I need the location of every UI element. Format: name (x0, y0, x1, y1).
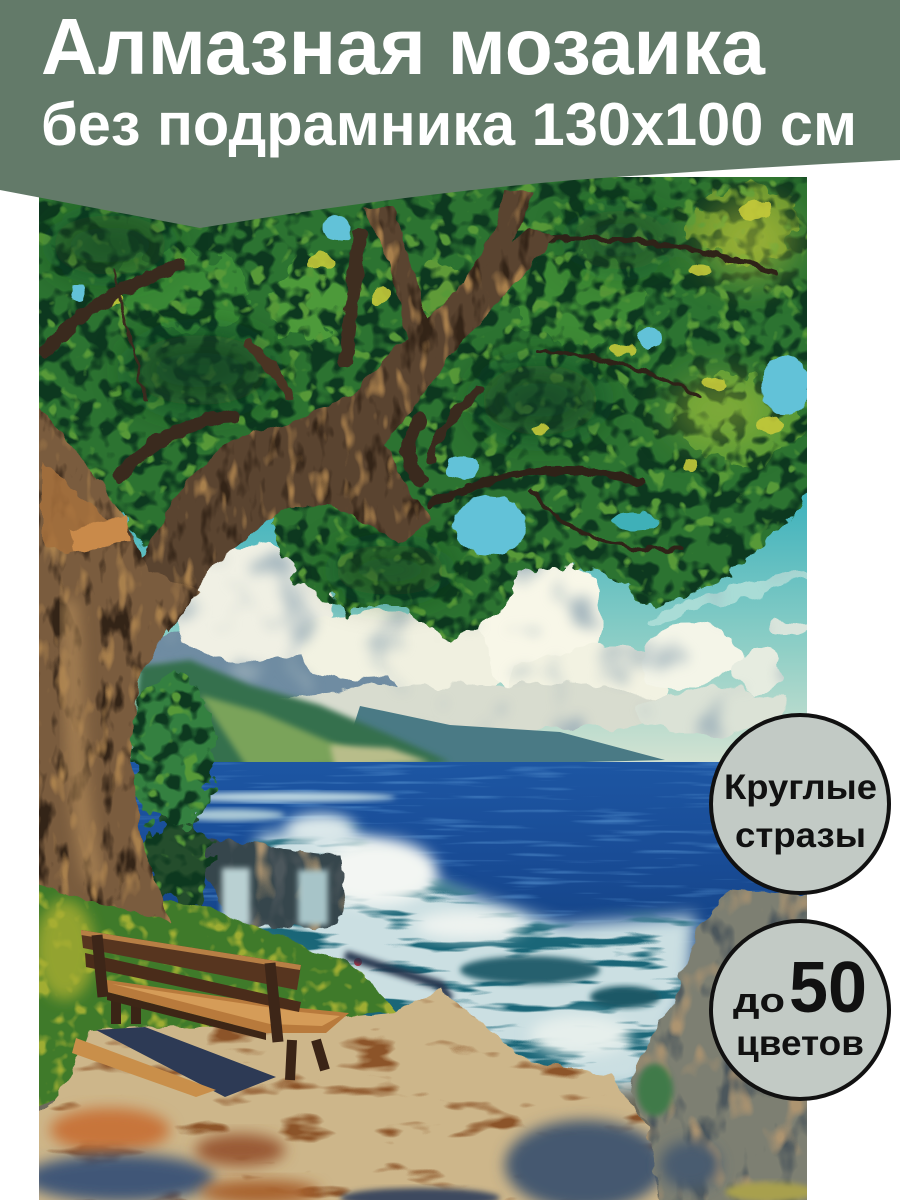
foliage mass (20, 160, 820, 640)
badge: up to 50 colours: до (733, 982, 785, 1020)
yellow leaf highlights (107, 200, 784, 473)
sea (130, 762, 807, 1040)
stone path (25, 955, 665, 1200)
small tree (130, 672, 214, 828)
badge: round rhinestones: стразы (735, 816, 866, 855)
mountains (130, 660, 665, 775)
main limbs (135, 190, 556, 632)
badge: up to 50 colours: цветов (736, 1024, 864, 1063)
waterfall ledge (195, 838, 345, 930)
sky gaps (70, 216, 809, 555)
sky (122, 492, 807, 762)
shrubs behind trunk (146, 816, 214, 908)
tree branches (45, 235, 775, 550)
badge: round rhinestones (711, 715, 889, 893)
clouds (130, 547, 824, 734)
subtitle: без подрамника 130х100 см (41, 91, 857, 158)
badge: up to 50 colours: 50 (789, 948, 867, 1028)
badge: up to 50 colours (711, 921, 889, 1099)
foam and surf (175, 792, 695, 1090)
right rocks (630, 890, 815, 1200)
bench shadow on ground (96, 1027, 276, 1097)
sea wave highlights (132, 762, 771, 926)
grass slope (39, 884, 396, 1106)
header banner (0, 0, 900, 228)
bench (81, 930, 349, 1080)
foliage shading (50, 200, 795, 595)
badge: round rhinestones: Круглые (724, 768, 877, 807)
underlay for ground (39, 1082, 660, 1200)
title: Алмазная мозаика (41, 2, 765, 91)
tree trunk (30, 395, 200, 922)
painting: seaside tree and bench (20, 160, 824, 1200)
